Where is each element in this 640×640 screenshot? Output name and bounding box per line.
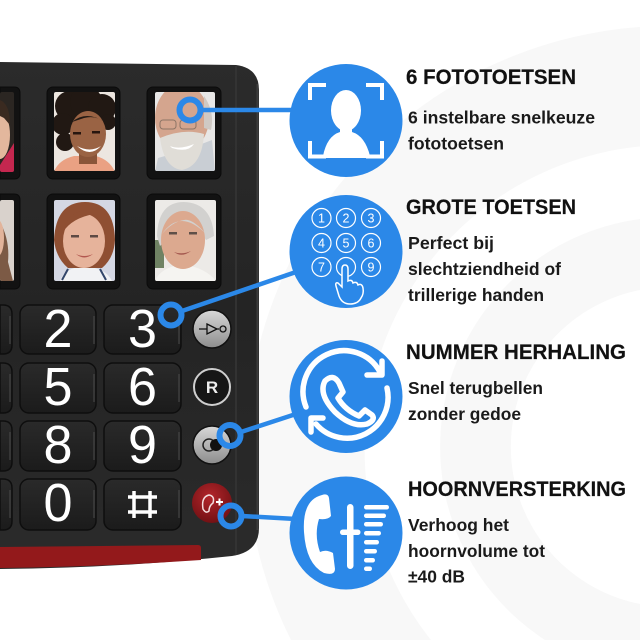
description: zonder gedoe xyxy=(408,404,521,424)
connector: handset boost xyxy=(220,506,296,526)
icon: keypad with hand: 2 xyxy=(343,212,350,226)
side function buttons xyxy=(192,310,232,523)
button: flash arrow xyxy=(193,310,231,348)
key digits: 0 xyxy=(44,473,72,533)
description xyxy=(408,515,545,586)
icon: keypad with hand: 4 xyxy=(318,236,325,250)
photo: woman with long hair xyxy=(0,200,14,281)
description: ±40 dB xyxy=(408,566,465,586)
icon: hash key xyxy=(128,491,157,518)
photo: doctor with red hair xyxy=(54,200,115,281)
description xyxy=(408,108,595,154)
connector: photo keys xyxy=(180,100,296,120)
button: R redial xyxy=(194,369,230,405)
key digits: 3 xyxy=(128,299,157,359)
description: Snel terugbellen xyxy=(408,378,543,398)
heading: HOORNVERSTERKING xyxy=(408,478,626,501)
icon: handset with volume slider xyxy=(290,476,402,590)
description: Perfect bij xyxy=(408,233,494,253)
photo: older man with beard xyxy=(155,92,215,171)
description xyxy=(408,233,561,305)
button: ear volume xyxy=(192,483,232,523)
heading: NUMMER HERHALING xyxy=(406,341,626,364)
key digits: 9 xyxy=(128,415,157,475)
telephone keypad body xyxy=(0,62,259,569)
key digits xyxy=(44,299,157,533)
photo: older woman with grey hair xyxy=(155,200,216,281)
description: hoornvolume tot xyxy=(408,541,545,561)
connector: big keys xyxy=(160,272,296,326)
photo keys xyxy=(0,84,221,289)
icon: keypad with hand: 9 xyxy=(368,260,375,274)
text block: hoornversterking xyxy=(408,478,626,586)
number keys xyxy=(0,299,181,533)
description: trillerige handen xyxy=(408,285,544,305)
background: concentric arcs xyxy=(246,27,640,640)
description xyxy=(408,378,543,424)
photo: smiling woman with curly hair xyxy=(54,92,115,171)
key digits: 8 xyxy=(44,415,72,475)
button: R redial: R xyxy=(206,378,218,397)
description: fototoetsen xyxy=(408,134,504,154)
connector: redial xyxy=(220,414,296,446)
description: 6 instelbare snelkeuze xyxy=(408,108,595,128)
text block: grote toetsen xyxy=(406,196,576,305)
key digits: 5 xyxy=(44,357,72,417)
icon: keypad with hand xyxy=(290,195,402,308)
photo: man in pink xyxy=(0,92,14,172)
icon: keypad with hand: 7 xyxy=(318,260,325,274)
description: Verhoog het xyxy=(408,515,509,535)
connector lines and rings xyxy=(160,100,296,526)
icon: keypad with hand: 1 xyxy=(318,212,325,226)
key digits: 6 xyxy=(128,357,157,417)
red strip xyxy=(0,545,201,568)
key digits: 2 xyxy=(44,299,72,359)
icon: keypad with hand: 6 xyxy=(368,236,375,250)
heading: 6 FOTOTOETSEN xyxy=(406,66,576,89)
button: mute xyxy=(193,426,231,464)
text block: 6 fototoetsen xyxy=(406,66,595,154)
description: slechtziendheid of xyxy=(408,259,561,279)
icon: keypad with hand: 3 xyxy=(368,212,375,226)
icon: portrait in frame xyxy=(290,64,402,177)
heading: GROTE TOETSEN xyxy=(406,196,576,219)
text block: nummer herhaling xyxy=(406,341,626,424)
photo key frames xyxy=(0,87,221,289)
icon: phone with circular arrows xyxy=(290,340,402,453)
icon: keypad with hand: 5 xyxy=(343,236,350,250)
